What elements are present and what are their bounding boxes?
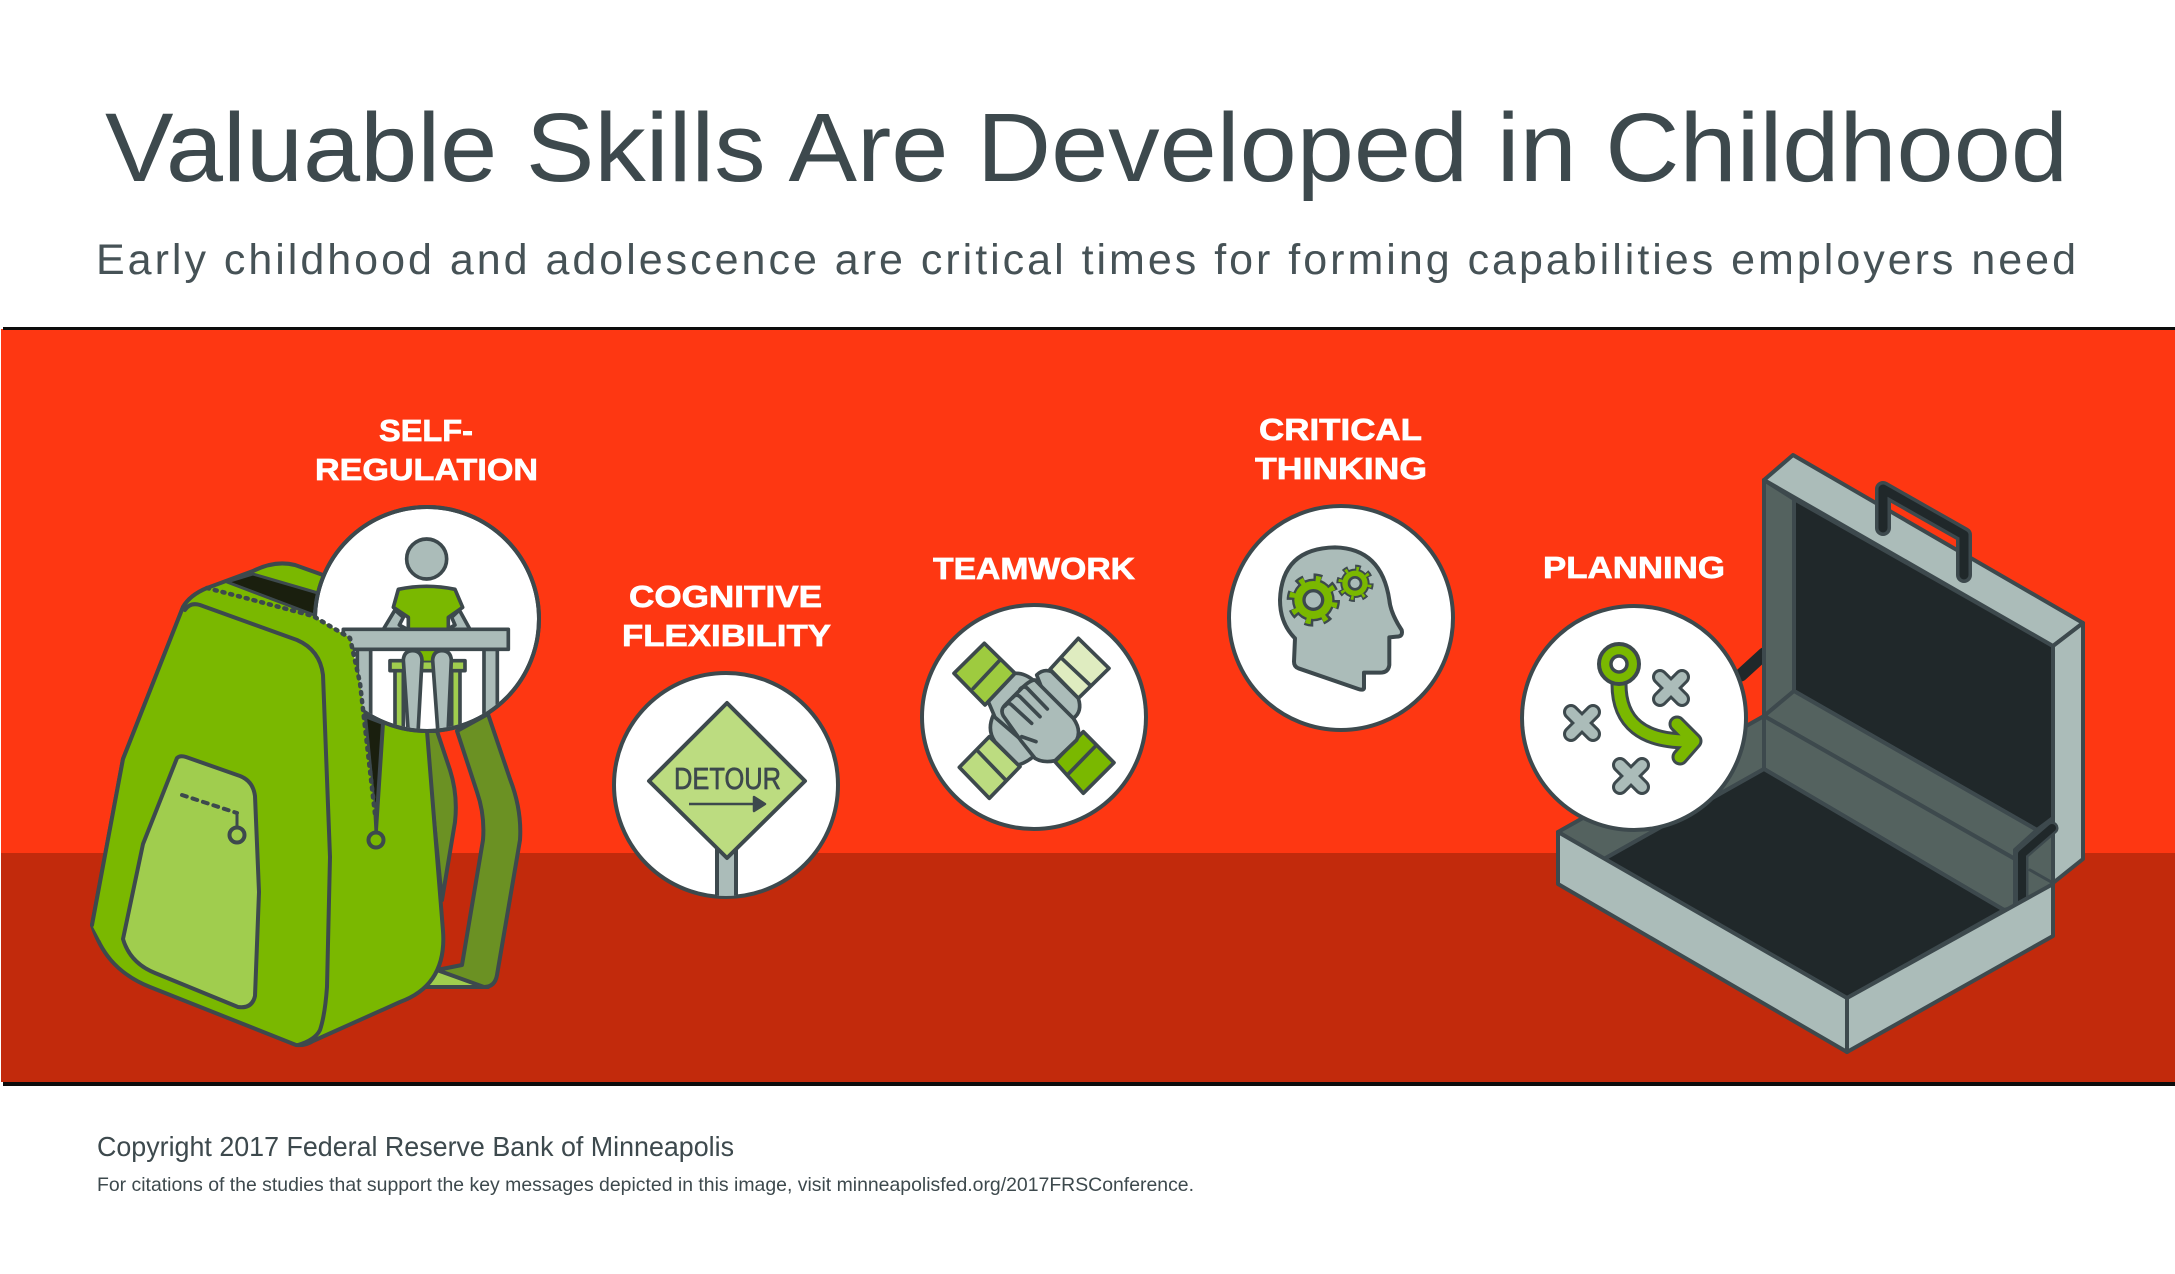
left outline — [92, 588, 207, 925]
sleeve bottom right — [1055, 732, 1114, 793]
backpack base sole — [420, 970, 488, 987]
top opening — [227, 574, 318, 615]
panel: red scene — [1, 327, 2175, 1086]
sleeve top right — [1050, 638, 1109, 698]
bottom rule — [3, 1082, 2175, 1086]
start ring — [1599, 644, 1639, 684]
sign diamond — [649, 703, 805, 858]
route outline — [1619, 684, 1694, 757]
x mark three fill — [1620, 765, 1642, 787]
label: critical thinking — [1255, 412, 1427, 486]
torso — [393, 586, 463, 630]
lid bottom inner strip — [1764, 691, 2037, 859]
circle background — [1229, 506, 1453, 730]
main zipper pull ring — [368, 832, 384, 848]
front panel seam — [185, 604, 330, 1045]
x mark one fill — [1660, 677, 1682, 699]
zipper opening — [365, 716, 383, 830]
gear hole — [1304, 591, 1323, 609]
sleeve top left — [954, 643, 1015, 705]
back hand upper — [1037, 671, 1080, 718]
top rule — [3, 327, 2175, 330]
circle: planning play diagram — [1522, 606, 1746, 830]
outer strap — [437, 714, 520, 987]
gear body outline — [1340, 569, 1370, 598]
small gear — [1340, 568, 1370, 599]
circle background — [1522, 606, 1746, 830]
rear strap — [1741, 654, 1764, 675]
circle rim — [315, 507, 539, 731]
hinge strap — [2022, 828, 2052, 903]
lap — [420, 651, 435, 661]
label: cognitive flexibility — [622, 579, 831, 653]
illustration: open briefcase — [1558, 455, 2083, 1052]
green teeth — [1340, 569, 1370, 598]
handle core — [1883, 489, 1964, 575]
large gear — [1291, 578, 1335, 622]
pocket zipper tail — [236, 813, 238, 829]
hinge recess — [2015, 818, 2053, 907]
line two: THINKING — [1255, 451, 1427, 486]
hinge strap outline — [2022, 828, 2052, 903]
teeth outline — [1291, 578, 1335, 622]
x mark three — [1620, 765, 1642, 787]
line two: FLEXIBILITY — [622, 618, 831, 653]
backpack main body — [92, 563, 443, 1045]
label: teamwork: TEAMWORK — [933, 551, 1136, 586]
footer: citations note: For citations of the studies that support the key messages depicted in this image, visit minneapolisfed.org/2017FRSConference. — [97, 1174, 1194, 1196]
illustration: backpack with self-regulation circle — [92, 507, 539, 1045]
base back wall — [1764, 716, 2015, 910]
head — [1280, 547, 1402, 690]
gear body outline — [1292, 579, 1335, 621]
head — [407, 539, 447, 579]
backpack front flap — [92, 588, 375, 940]
start ring hole — [1611, 656, 1627, 672]
zipper tail — [375, 814, 376, 833]
footer: copyright: Copyright 2017 Federal Reserve Bank of Minneapolis — [97, 1131, 734, 1162]
circle: teamwork hands — [922, 605, 1146, 829]
circle background — [922, 605, 1146, 829]
legs — [403, 651, 451, 733]
circle background — [614, 673, 838, 897]
base front right face — [1847, 884, 2053, 1052]
pocket zipper ring — [230, 828, 244, 842]
main zipper dotted line — [207, 588, 375, 814]
green teeth — [1292, 579, 1335, 621]
teeth outline — [1340, 568, 1370, 599]
base front left face — [1558, 832, 1847, 1052]
sign post — [717, 845, 736, 899]
lid right face — [2053, 623, 2083, 883]
label: planning: PLANNING — [1543, 550, 1725, 585]
x mark two — [1571, 712, 1593, 734]
inner strap — [425, 731, 456, 900]
pocket zipper — [182, 795, 237, 813]
base left wall — [1558, 716, 1764, 859]
top hand — [1002, 680, 1079, 762]
circle: head with gears — [1229, 506, 1453, 730]
route fill — [1619, 684, 1694, 757]
lid inner left wall — [1764, 480, 1794, 716]
circle background — [315, 507, 539, 731]
label: self-regulation — [315, 413, 538, 487]
line two: REGULATION — [315, 452, 538, 487]
base floor — [1604, 769, 2004, 998]
subtitle: Early childhood and adolescence are critical times for forming capabilities employers need — [96, 236, 2076, 284]
back hand lower — [990, 715, 1035, 765]
gear hole — [1349, 577, 1361, 589]
finger lines — [1005, 687, 1047, 742]
floor — [1, 853, 2175, 1082]
middle hand — [988, 673, 1047, 742]
x mark one — [1660, 677, 1682, 699]
circle: detour sign — [614, 673, 838, 899]
chair seat — [390, 661, 465, 671]
lid interior — [1794, 499, 2053, 830]
line one: COGNITIVE — [629, 579, 822, 614]
chair legs — [393, 672, 462, 727]
line one: SELF- — [379, 413, 473, 448]
lid top face — [1764, 455, 2083, 646]
hinge seam — [2030, 870, 2053, 883]
arms — [383, 610, 470, 629]
sleeve bottom left — [959, 737, 1020, 798]
seated figure at desk — [343, 539, 508, 743]
wall — [1, 329, 2175, 854]
sign text: DETOUR — [674, 761, 781, 796]
line one: CRITICAL — [1259, 412, 1422, 447]
title: Valuable Skills Are Developed in Childhood — [105, 93, 2068, 202]
hands and sleeves — [954, 638, 1114, 798]
handle — [1883, 489, 1964, 575]
desk top — [343, 629, 508, 649]
front pocket — [123, 756, 259, 1007]
x mark two fill — [1571, 712, 1593, 734]
head and gears — [1280, 547, 1402, 690]
desk legs — [356, 651, 500, 714]
circle: self-regulation — [315, 507, 539, 743]
gear rim — [1342, 571, 1368, 596]
gear rim — [1294, 581, 1332, 619]
sign arrow — [689, 797, 765, 811]
